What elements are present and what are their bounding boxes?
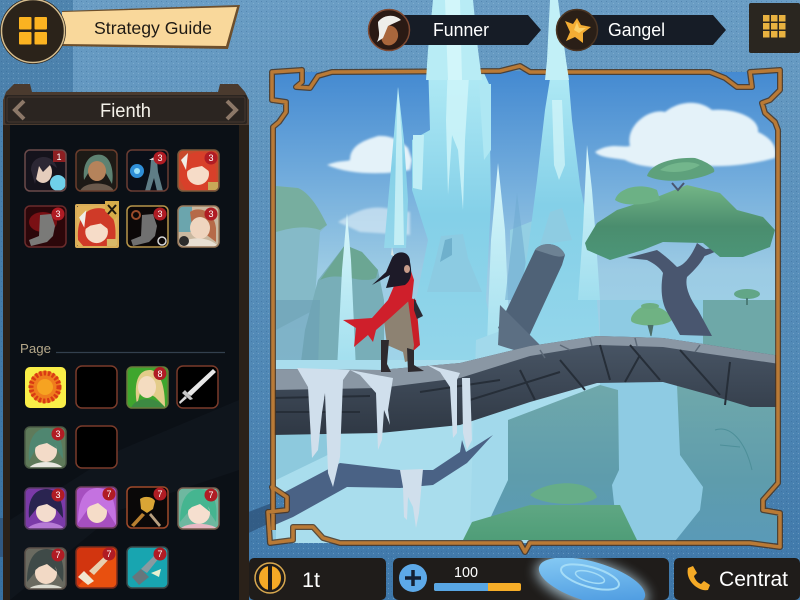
character: [343, 247, 424, 372]
page icon: green-haired character: 3: [55, 429, 61, 439]
bottom bar: contact button: Centrat: [719, 568, 788, 591]
page icon: mint-haired character: [178, 488, 219, 529]
icon row 1: dark-haired hero: 1: [56, 152, 62, 162]
icon row 1: red-haired heroine: 3: [208, 153, 214, 163]
icon row 2: auburn-haired character: 3: [208, 209, 214, 219]
page icon: fire sword: [76, 547, 117, 588]
icon row 2: crimson gauntlet: 3: [55, 209, 61, 219]
clouds: [327, 103, 776, 235]
page icon: grey-haired character: 7: [55, 550, 61, 560]
page icon: green-haired character: [25, 427, 66, 468]
player tab: Funner: [368, 10, 541, 50]
page icon: pink-haired character: [76, 487, 117, 528]
header: menu button and banner: [0, 0, 240, 64]
player tab: Funner: Funner: [433, 20, 489, 40]
page icon: blonde character: [127, 367, 168, 408]
left arrow: [15, 101, 24, 119]
ice towers: [337, 60, 600, 370]
small distant trees: [631, 289, 760, 336]
icicles: [297, 365, 472, 528]
player tab: Gangel: [556, 10, 726, 50]
icon row 2: selected red-haired heroine: [76, 201, 119, 247]
banner: Strategy Guide: Strategy Guide: [94, 18, 212, 38]
side panel: [3, 84, 249, 600]
ornate golden frame: [268, 66, 780, 552]
section label: Page: Page: [20, 341, 51, 356]
avatar: [368, 10, 410, 50]
grid button: [749, 3, 800, 53]
icon row 2: crimson gauntlet: [25, 206, 66, 247]
page icon: sun: [25, 367, 66, 408]
page icon: empty slot: [76, 426, 117, 468]
right arrow: [227, 101, 236, 119]
icon row 1: dark-haired hero: [25, 150, 66, 191]
page icon: grey-haired character: [25, 548, 66, 589]
menu button: [0, 0, 66, 64]
player tab: Gangel: Gangel: [608, 20, 665, 40]
bottom bar: coin counter: [249, 558, 386, 600]
broken bridge segment: [498, 244, 565, 355]
selected marker: [105, 201, 119, 220]
lower branch: [270, 435, 493, 526]
panel header: Fienth: [100, 101, 151, 122]
game scene illustration: [271, 71, 778, 543]
icon row 1: blue spark mage: 3: [157, 153, 163, 163]
phone icon: [688, 566, 710, 590]
page icon: teal blaster: 7: [157, 549, 163, 559]
distant rock mounds: [276, 186, 532, 360]
icon row 1: blue spark mage: [127, 150, 168, 191]
page icon: blonde character: 8: [157, 369, 163, 379]
left-centre and right rock columns: [480, 300, 778, 545]
icon row 2: iron gauntlet: [127, 206, 168, 247]
page icon: mint-haired character: 7: [208, 490, 214, 500]
page icon: golden staff: [127, 487, 168, 528]
plus button: [399, 564, 427, 592]
avatar: [556, 10, 598, 50]
icon row 2: iron gauntlet: 3: [157, 209, 163, 219]
icon row 1: green hooded figure: [76, 150, 117, 191]
panel header: [3, 84, 249, 125]
portal: [528, 558, 656, 600]
progress bar: [434, 583, 521, 591]
page icon: silver sword: [177, 366, 218, 408]
big tree: [585, 158, 775, 336]
icon row 2: auburn-haired character: [178, 206, 219, 247]
banner: Strategy Guide: [62, 5, 240, 49]
icon row 1: red-haired heroine: [178, 150, 219, 191]
page icon: pink-haired character: 7: [106, 489, 112, 499]
page icon: dark-haired purple character: [25, 488, 66, 529]
page icon: teal blaster: [127, 547, 168, 588]
page icon: golden staff: 7: [157, 489, 163, 499]
green bushes: [463, 483, 637, 540]
ruined stone bridge: [272, 336, 780, 435]
page icon: fire sword: 7: [106, 549, 112, 559]
bottom bar: contact button: [674, 558, 800, 600]
bottom bar: energy and portal: 100: [454, 564, 478, 581]
ice spires overlapping frame top: [426, 0, 569, 80]
page icon: empty slot: [76, 366, 117, 408]
bottom bar: coin counter: 1t: [302, 569, 320, 592]
misty waterfall and lower background: [276, 300, 703, 543]
coin icon: [255, 563, 285, 593]
page icon: dark-haired purple character: 3: [55, 490, 61, 500]
sky: [260, 60, 790, 560]
bottom bar: energy and portal: [393, 558, 669, 600]
